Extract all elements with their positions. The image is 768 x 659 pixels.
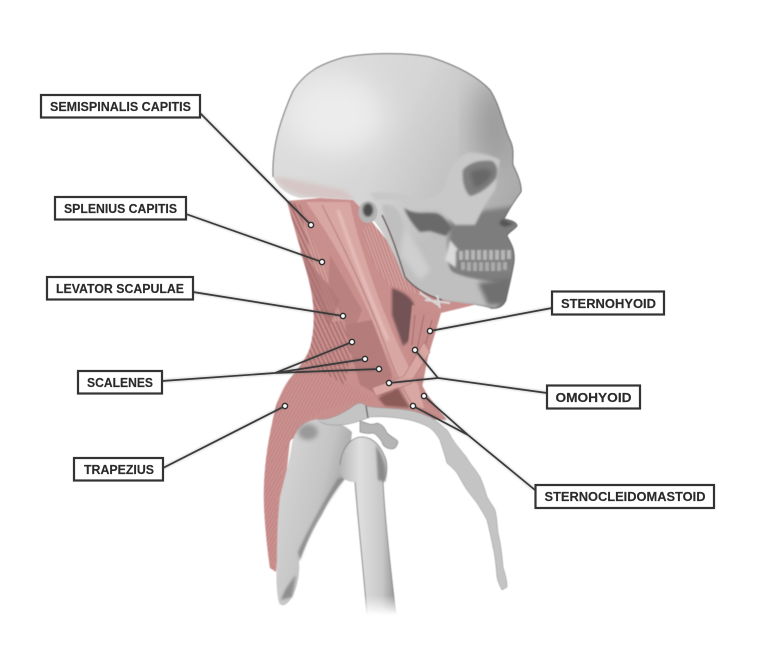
label: splenius capitis	[55, 197, 186, 220]
label: omohyoid	[547, 386, 640, 408]
jaw lower edge shadow	[382, 215, 442, 300]
label: sternocleidomastoid: STERNOCLEIDOMASTOID	[544, 490, 706, 504]
hollow above clavicle	[378, 388, 410, 408]
leader end dots	[282, 222, 433, 409]
label: sternohyoid: STERNOHYOID	[561, 297, 656, 311]
label: scalenes	[78, 371, 162, 394]
cranium shading	[285, 75, 385, 155]
lines: sternocleidomastoid	[413, 396, 535, 490]
splenius and levator strips	[302, 215, 345, 322]
lines: omohyoid	[389, 350, 547, 393]
label: levator scapulae: LEVATOR SCAPULAE	[56, 282, 184, 296]
leader lines	[162, 113, 552, 490]
scapula	[276, 419, 352, 605]
label: splenius capitis: SPLENIUS CAPITIS	[64, 202, 177, 216]
line: trapezius	[163, 406, 285, 468]
sternohyoid strap	[408, 305, 440, 418]
ear canal	[358, 201, 378, 223]
trapezius and neck muscle mass	[264, 198, 478, 572]
mandible	[382, 204, 506, 308]
label: semispinalis capitis: SEMISPINALIS CAPITIS	[50, 100, 191, 114]
label: sternocleidomastoid	[536, 485, 714, 508]
trapezius upper band	[287, 201, 352, 385]
nasal cavity	[499, 219, 514, 227]
illustration: neck muscles, skull and shoulder bones	[264, 54, 525, 615]
omohyoid	[372, 342, 430, 396]
label: sternohyoid	[552, 292, 664, 314]
hyoid	[420, 293, 450, 308]
lines: scalenes	[162, 342, 379, 381]
humerus	[340, 437, 396, 615]
label: trapezius: TRAPEZIUS	[84, 463, 154, 477]
label: trapezius	[74, 458, 163, 480]
skull	[273, 54, 525, 312]
label: scalenes: SCALENES	[87, 376, 153, 390]
line: semispinalis capitis	[200, 113, 311, 225]
label: omohyoid: OMOHYOID	[556, 391, 632, 405]
line: sternohyoid	[430, 308, 552, 331]
line: splenius capitis	[186, 214, 322, 262]
muscle under jaw	[362, 222, 422, 296]
label: semispinalis capitis	[41, 95, 200, 118]
line: levator scapulae	[193, 292, 343, 316]
eye orbit	[463, 161, 497, 196]
sternocleidomastoid	[306, 202, 432, 408]
coracoid process	[360, 421, 398, 449]
deep dark hollow	[392, 288, 414, 346]
clavicle and rib	[318, 403, 507, 590]
label: levator scapulae	[47, 277, 193, 300]
teeth	[456, 249, 514, 273]
temporal gap	[404, 208, 452, 236]
deep scalenes	[345, 320, 392, 400]
cheekbone	[370, 153, 500, 225]
face shadow	[446, 205, 517, 308]
